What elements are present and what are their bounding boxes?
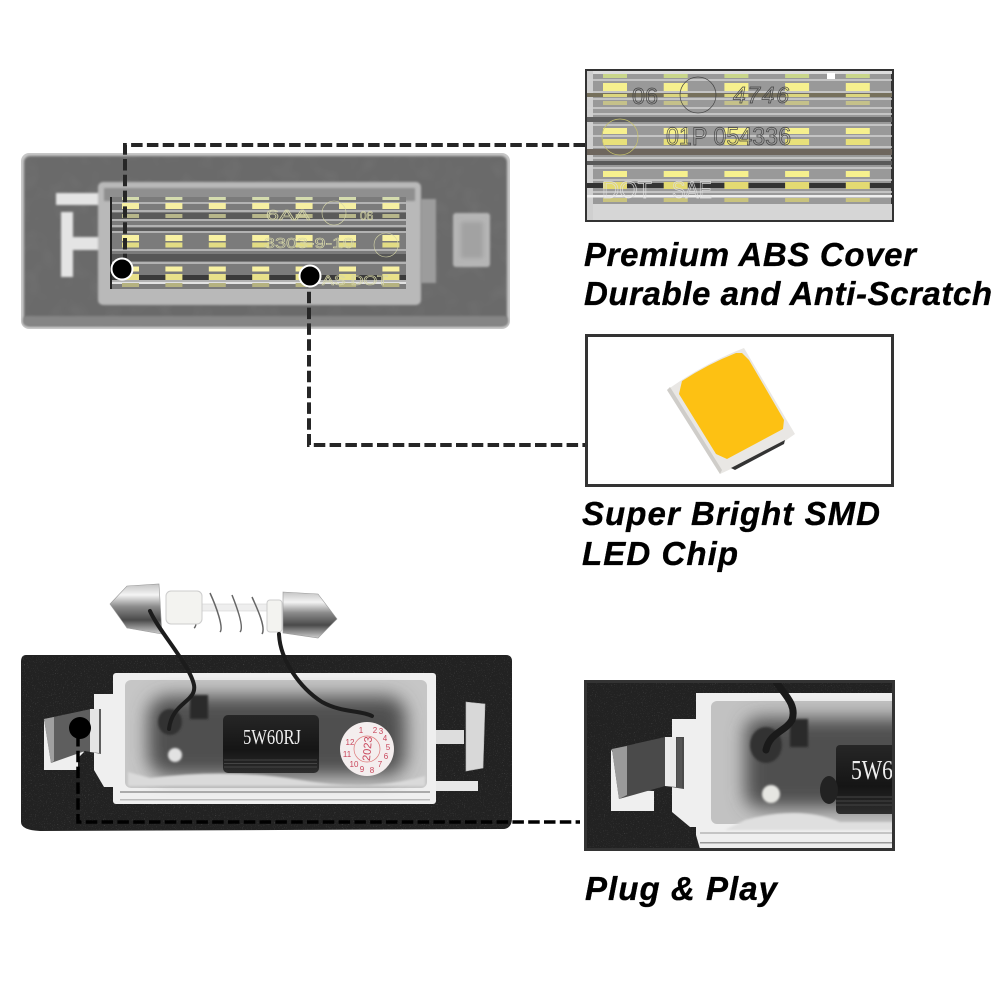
date sticker: 4: [383, 734, 388, 743]
date sticker: 12: [346, 738, 355, 747]
festoon bulb: [110, 584, 337, 638]
connector: LED chip detail: [309, 276, 585, 445]
plastic housing: [113, 673, 436, 804]
wires: [150, 611, 372, 729]
date sticker: [340, 722, 394, 776]
left cap: [110, 584, 162, 634]
LED window: [110, 197, 406, 289]
panel: plug and play close-up: [584, 680, 895, 851]
right cap: [283, 592, 337, 638]
resistor label: 5W60RJ: [243, 725, 301, 749]
heading: Plug & Play: Plug & Play: [585, 870, 779, 907]
engraved markings: 6AA: [266, 207, 310, 224]
date sticker: 9: [360, 765, 365, 774]
solder pad: [750, 727, 782, 763]
callout dot: cover: [112, 258, 132, 280]
panel: SMD LED chip: [586, 336, 892, 486]
engraved markings: SAE: [672, 177, 712, 204]
metal clip: [611, 749, 654, 811]
date sticker: 6: [384, 752, 389, 761]
date sticker: 11: [343, 750, 352, 759]
load resistor: [223, 715, 319, 773]
engraved markings: DOT: [602, 177, 652, 204]
resistor label: 5W60RJ: [851, 756, 927, 786]
engraved markings: 3303-9-10: [264, 235, 354, 252]
product photo: lamp front with LED cover: [21, 153, 510, 329]
product photo: lamp back with bulb: [21, 584, 512, 831]
LED chips rows: [603, 76, 892, 200]
metal clip: [44, 709, 101, 770]
heading: Premium ABS Cover: Premium ABS Cover: [584, 236, 918, 273]
right tab and pin: [436, 702, 485, 791]
callout dot: clip: [69, 717, 91, 739]
left block: [672, 719, 696, 827]
engraved markings: AS DOT: [322, 272, 389, 288]
resistor: [820, 745, 892, 814]
engraved markings: 06: [360, 209, 374, 223]
date sticker: 3: [379, 727, 384, 736]
engraved markings: 06: [632, 83, 658, 109]
date sticker: 2023: [361, 736, 375, 761]
panel: ABS cover close-up: [586, 70, 892, 220]
window frame: [98, 182, 421, 305]
LED chips rows: [122, 198, 402, 285]
engraved markings: 4746: [733, 82, 789, 108]
left tab: [94, 694, 118, 787]
housing: [696, 693, 892, 849]
date sticker: 5: [386, 743, 391, 752]
heading: LED Chip: LED Chip: [582, 535, 738, 572]
heading: Durable and Anti-Scratch: Durable and Anti-Scratch: [584, 275, 992, 312]
molded T mark: [56, 193, 101, 277]
right slot: [453, 213, 490, 267]
lamp plate: [21, 153, 510, 329]
spring and rod: [200, 604, 270, 611]
date sticker: 1: [359, 726, 364, 735]
date sticker: 7: [378, 760, 383, 769]
engraved markings: [602, 77, 791, 204]
date sticker: 2: [373, 726, 378, 735]
connector: cover detail: [125, 145, 585, 268]
icon: LED chip: [667, 348, 795, 474]
connector: plug and play detail: [78, 735, 580, 822]
heading: Super Bright SMD: Super Bright SMD: [582, 495, 880, 532]
callout dot: LED chip: [300, 266, 320, 286]
date sticker: 8: [370, 766, 375, 775]
wire: [766, 682, 793, 750]
engraved markings: [264, 201, 398, 288]
engraved markings: 01P 054336: [666, 123, 791, 151]
foam backing: [21, 655, 512, 831]
date sticker: 10: [350, 760, 359, 769]
